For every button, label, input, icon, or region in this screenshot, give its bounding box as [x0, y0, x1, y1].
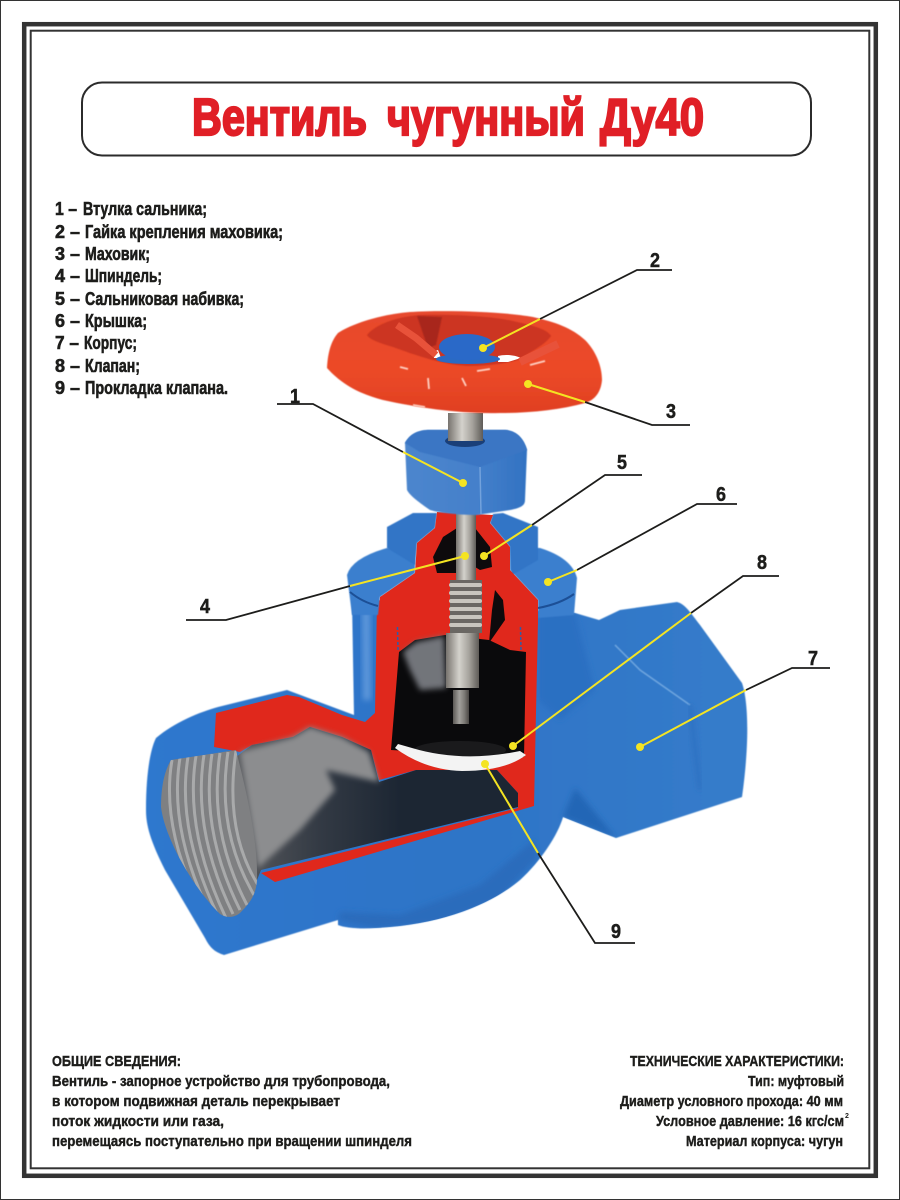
leader 3: 3 — [666, 401, 676, 423]
legend: parts list: 8 – — [55, 355, 80, 376]
leader 9: 9 — [611, 921, 621, 943]
technical specifications text: Тип: муфтовый — [748, 1074, 844, 1090]
general information text: перемещаясь поступательно при вращении шпинделя — [52, 1134, 412, 1150]
hub nut — [436, 334, 500, 364]
technical specifications text: 2 — [845, 1113, 849, 1120]
title: Ду40 — [600, 89, 704, 147]
leader 6: 6 — [716, 484, 726, 506]
leader 3 — [524, 380, 690, 425]
leader 4 — [186, 552, 469, 620]
valve chamber — [391, 635, 526, 757]
cap hex — [387, 513, 538, 575]
chamber grey dome — [403, 636, 446, 690]
legend: parts list: 2 – — [55, 221, 80, 242]
legend: parts list: 3 – — [55, 243, 80, 264]
gland nut — [405, 420, 527, 515]
gland seam lines — [397, 607, 521, 650]
legend: parts list: 4 – — [55, 265, 80, 286]
grey casting surface — [240, 727, 379, 868]
title: чугунный — [387, 89, 585, 147]
leader 4: 4 — [200, 596, 211, 618]
handwheel — [327, 311, 602, 413]
legend: parts list: 6 – — [55, 310, 80, 331]
legend: parts list: 9 – — [55, 377, 80, 398]
technical specifications text: Диаметр условного прохода: 40 мм — [620, 1094, 843, 1110]
leader 8: 8 — [757, 552, 767, 574]
leader 1: 1 — [290, 386, 300, 408]
legend: parts list: 7 – — [55, 332, 79, 353]
leader 2: 2 — [650, 250, 660, 272]
white gasket — [395, 744, 526, 771]
leader 7 — [636, 648, 830, 751]
legend: parts list: Шпиндель; — [85, 265, 162, 286]
technical specifications text: ТЕХНИЧЕСКИЕ ХАРАКТЕРИСТИКИ: — [630, 1054, 844, 1070]
legend: parts list: Маховик; — [85, 243, 150, 264]
cut section in red — [214, 600, 538, 882]
general information text: ОБЩИЕ СВЕДЕНИЯ: — [52, 1054, 181, 1070]
red upper cut — [378, 512, 538, 625]
general information text: в котором подвижная деталь перекрывает — [52, 1094, 340, 1110]
legend: parts list: Втулка сальника; — [83, 198, 207, 219]
spindle stem — [446, 413, 483, 724]
technical specifications text — [620, 1054, 849, 1150]
packing cavity — [433, 528, 505, 643]
general information text — [52, 1054, 412, 1150]
leader 2 — [479, 250, 672, 352]
legend: parts list: 1 – — [55, 198, 77, 219]
inner water passage — [236, 727, 518, 880]
valve disc — [414, 741, 506, 759]
technical specifications text: Материал корпуса: чугун — [686, 1134, 843, 1150]
technical specifications text: Условное давление: 16 кгс/см — [656, 1114, 844, 1130]
cap flange — [347, 546, 577, 618]
legend: parts list: Сальниковая набивка; — [85, 288, 244, 309]
title — [192, 89, 704, 147]
legend: parts list: 5 – — [55, 288, 80, 309]
leader 5 — [480, 452, 642, 560]
leader 8 — [509, 552, 779, 750]
general information text: Вентиль - запорное устройство для трубопровода, — [52, 1074, 390, 1090]
title box — [82, 82, 811, 156]
legend: parts list: Прокладка клапана. — [85, 377, 228, 398]
valve illustration — [146, 311, 747, 955]
general information text: поток жидкости или газа, — [52, 1114, 224, 1130]
valve body — [146, 600, 747, 955]
title: Вентиль — [192, 89, 367, 147]
leader 1 — [277, 386, 467, 487]
leader 6 — [544, 484, 737, 586]
legend: parts list: Корпус; — [84, 332, 137, 353]
legend: parts list — [55, 198, 283, 398]
leader 7: 7 — [808, 648, 818, 670]
leader 9 — [481, 760, 635, 943]
legend: parts list: Клапан; — [85, 355, 140, 376]
wheel opening — [367, 315, 551, 366]
legend: parts list: Крышка; — [85, 310, 147, 331]
leader 5: 5 — [617, 452, 627, 474]
legend: parts list: Гайка крепления маховика; — [85, 221, 283, 242]
threaded port — [161, 750, 258, 918]
